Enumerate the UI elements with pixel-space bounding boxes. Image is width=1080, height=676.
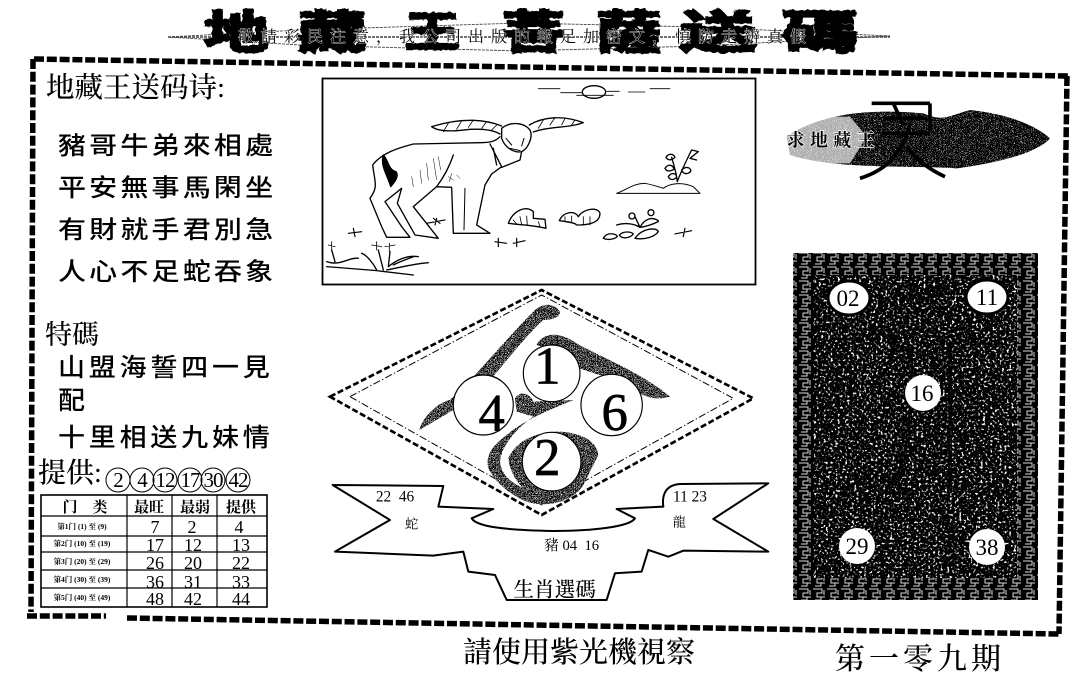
table values <box>146 517 250 609</box>
poem lines <box>58 125 276 287</box>
icon: goat <box>370 118 583 238</box>
poem lines: 平安無事馬閑坐 <box>58 167 276 203</box>
panel: special code <box>45 320 274 454</box>
table values: 2 <box>188 517 196 537</box>
special code lines: 十里相送九妹情 <box>58 418 274 454</box>
badge big character <box>860 103 945 178</box>
board hidden character <box>870 285 950 495</box>
poem lines: 有財就手君別急 <box>58 209 276 245</box>
provided numbers <box>38 457 250 492</box>
number circles: 11 <box>976 285 998 310</box>
poem lines: 豬哥牛弟來相處 <box>58 125 276 161</box>
number circles <box>453 345 642 491</box>
table row labels: 第2门 (10) 至 (19) <box>54 538 111 548</box>
circle numbers: 2 <box>534 429 560 487</box>
special code lines: 配 <box>58 381 89 417</box>
number circles: 02 <box>836 286 860 311</box>
title overlay notice: 敬請彩民注意，我公司出版的報足加密文，慎防走辨真假 <box>238 27 813 46</box>
provided numbers: 12 <box>156 468 175 492</box>
table header: 提供 <box>226 498 257 516</box>
provided numbers: 42 <box>228 468 248 492</box>
table values: 17 <box>146 535 164 555</box>
icon: sun <box>538 86 670 98</box>
table row labels <box>54 521 111 602</box>
table values: 12 <box>184 535 202 555</box>
table values: 13 <box>232 535 250 555</box>
table values: 48 <box>146 589 164 609</box>
table values: 42 <box>184 589 202 609</box>
provided numbers: 2 <box>113 468 123 492</box>
table row labels: 第5门 (40) 至 (49) <box>54 592 111 602</box>
table values: 44 <box>232 589 250 609</box>
title text: 王 <box>405 0 460 60</box>
panel: poem <box>46 72 276 287</box>
provided numbers: 17 <box>180 468 200 492</box>
poem heading: 地藏王送码诗: <box>46 72 225 104</box>
table row labels: 第3门 (20) 至 (29) <box>54 556 111 566</box>
circle numbers: 6 <box>601 384 628 442</box>
ribbon labels <box>376 489 707 554</box>
panel: diamond with numbers <box>330 290 753 515</box>
panel: zodiac ribbon <box>333 483 768 601</box>
table row labels: 第1门 (1) 至 (9) <box>57 521 107 531</box>
brush character <box>419 305 670 504</box>
table values: 31 <box>184 572 202 592</box>
number circles: 29 <box>846 534 868 559</box>
panel: goat illustration <box>322 78 756 284</box>
icon: plants <box>327 150 700 275</box>
table row labels: 第4门 (30) 至 (39) <box>54 574 111 584</box>
ribbon labels: 11 23 <box>673 489 707 506</box>
diamond outline <box>330 290 753 515</box>
panel: speckled number board <box>793 253 1038 600</box>
provided numbers: 4 <box>137 468 148 492</box>
ribbon labels: 22 46 <box>376 489 414 506</box>
provided numbers: 提供: <box>38 457 102 489</box>
table values: 20 <box>184 553 202 573</box>
table values: 22 <box>232 553 250 573</box>
table: door categories <box>41 495 267 609</box>
number circles <box>828 280 1008 565</box>
table values: 33 <box>232 572 250 592</box>
table header: 最旺 <box>134 499 164 516</box>
table values: 26 <box>146 553 164 573</box>
table header <box>62 498 257 516</box>
footer instruction: 請使用紫光機視察 <box>463 636 695 669</box>
badge text: 求地藏王 <box>787 130 880 151</box>
ribbon labels: 龍 <box>673 514 686 529</box>
icon: insects <box>348 218 692 247</box>
board speckle <box>814 275 1017 578</box>
ribbon outline <box>333 483 768 600</box>
table values: 36 <box>146 572 164 592</box>
board maze border <box>793 253 1038 600</box>
ribbon labels: 豬 04 16 <box>544 537 599 554</box>
table values: 4 <box>234 517 244 537</box>
table values: 7 <box>150 517 160 537</box>
number circles: 38 <box>976 535 998 560</box>
circle numbers: 4 <box>478 385 505 443</box>
provided numbers: 30 <box>204 468 223 492</box>
issue number: 第一零九期 <box>835 643 1005 676</box>
title banner <box>168 0 890 62</box>
circle numbers: 1 <box>534 337 560 395</box>
special code lines: 山盟海誓四一見 <box>58 348 274 384</box>
table header: 门 类 <box>62 498 108 516</box>
ribbon labels: 蛇 <box>405 516 418 531</box>
table header: 最弱 <box>180 499 210 516</box>
special code heading: 特碼 <box>45 320 99 350</box>
special code lines <box>58 348 274 454</box>
poem lines: 人心不足蛇吞象 <box>58 251 276 287</box>
title text <box>204 0 859 62</box>
circle numbers <box>478 337 628 487</box>
ribbon title: 生肖選碼 <box>513 578 596 601</box>
board background <box>793 253 1038 600</box>
badge speckled ellipse <box>780 110 1050 168</box>
number circles: 16 <box>910 381 934 406</box>
panel: prayer badge <box>780 103 1050 178</box>
icon: rocks <box>508 209 658 239</box>
